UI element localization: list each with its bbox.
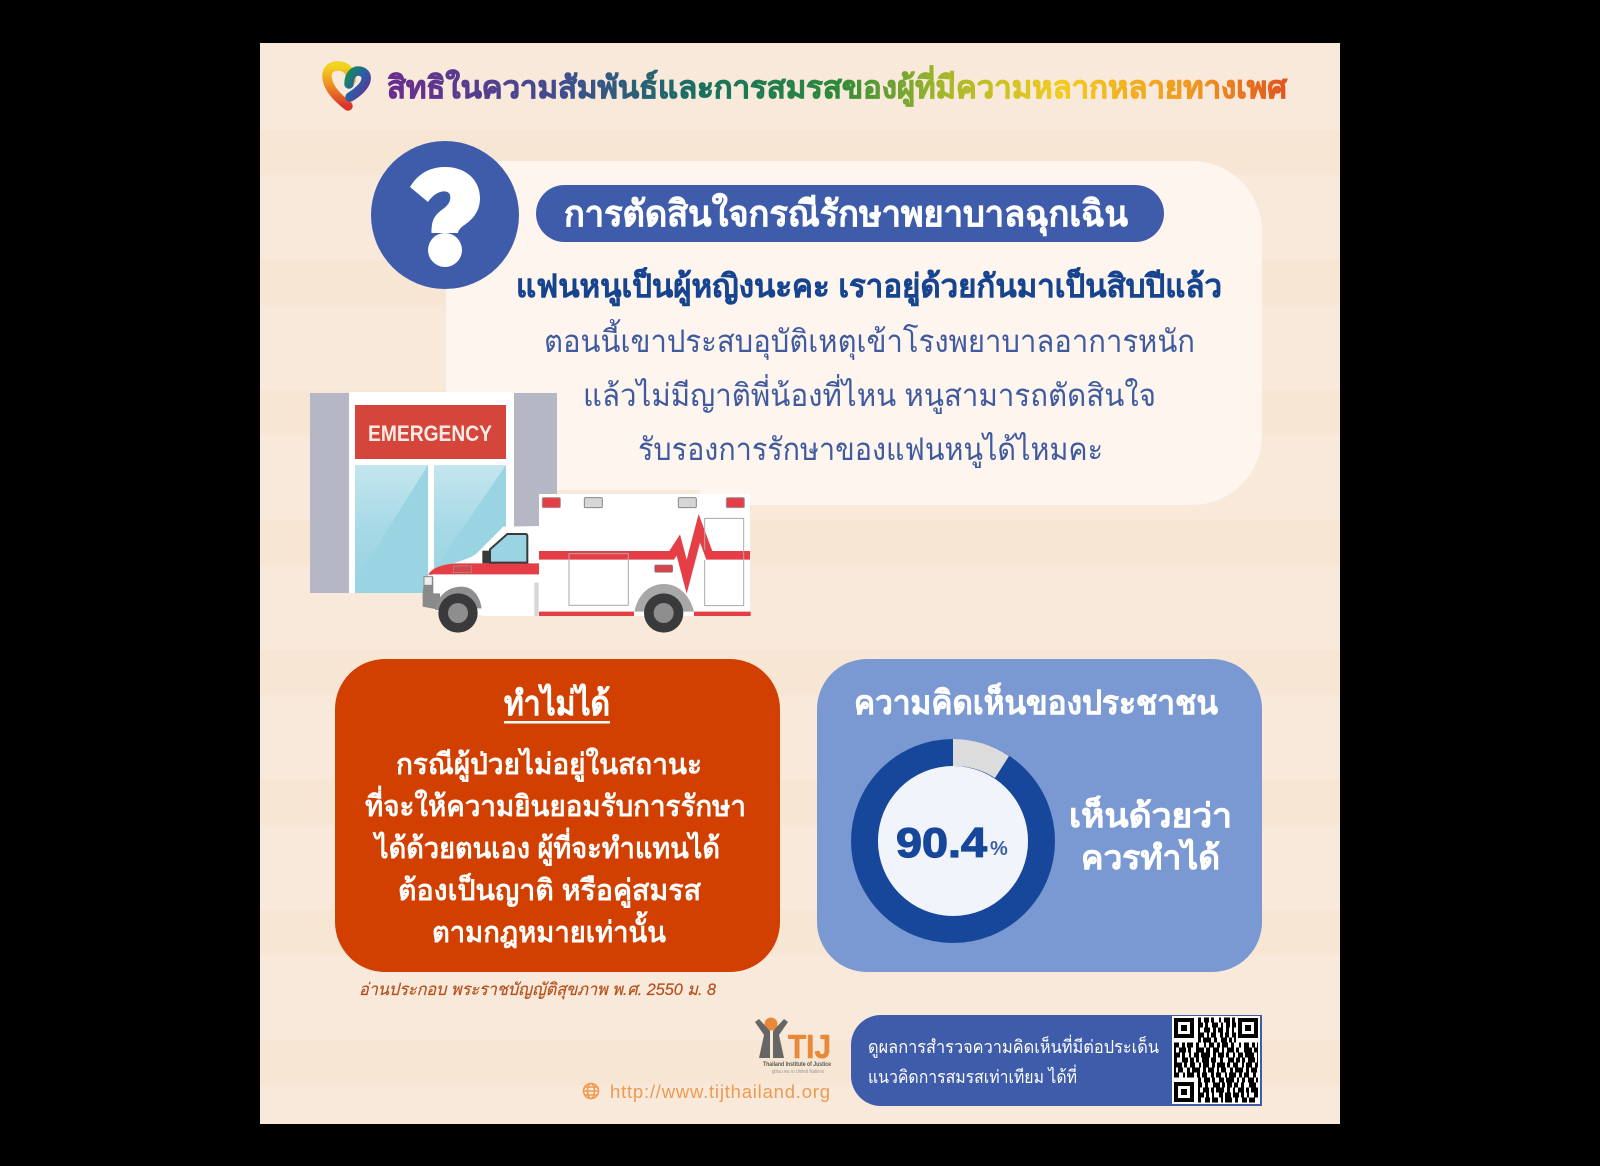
survey text	[868, 1034, 1159, 1087]
panel heading: cannot do: ทำไม่ได้	[504, 683, 610, 723]
QR code	[1172, 1016, 1260, 1104]
logo: TIJ: TIJ	[788, 1028, 831, 1065]
opinion label: เห็นด้วยว่า	[1069, 795, 1232, 834]
explanation text	[365, 747, 746, 949]
panel: survey link with QR	[851, 1015, 1262, 1106]
question text: รับรองการรักษาของแฟนหนูได้ไหมคะ	[638, 432, 1103, 468]
panel: public opinion	[817, 659, 1262, 972]
panel heading: public opinion: ความคิดเห็นของประชาชน	[854, 682, 1218, 721]
opinion label: ควรทำได้	[1081, 838, 1220, 876]
explanation text: ได้ด้วยตนเอง ผู้ที่จะทำแทนได้	[372, 827, 720, 866]
panel: question bubble	[446, 161, 1262, 505]
logo: TIJ: Thailand Institute of Justice	[763, 1061, 831, 1068]
question text: แล้วไม่มีญาติพี่น้องที่ไหน หนูสามารถตัดสินใจ	[583, 374, 1156, 414]
poster background	[260, 43, 1340, 1124]
donut chart: 90.4%	[864, 739, 1042, 930]
question text	[516, 266, 1222, 468]
explanation text: กรณีผู้ป่วยไม่อยู่ในสถานะ	[396, 747, 702, 782]
logo: rainbow heart	[327, 66, 366, 106]
source note: อ่านประกอบ พระราชบัญญัติสุขภาพ พ.ศ. 2550 ม. 8	[359, 980, 717, 1000]
icon: question mark circle	[371, 141, 519, 289]
donut chart: 90.4%: 90.4	[896, 819, 988, 866]
panel: cannot do	[335, 659, 780, 972]
survey text: ดูผลการสำรวจความคิดเห็นที่มีต่อประเด็น	[868, 1034, 1159, 1058]
logo: TIJ	[755, 1018, 831, 1075]
heading pill: การตัดสินใจกรณีรักษาพยาบาลฉุกเฉิน	[564, 192, 1128, 237]
title: สิทธิในความสัมพันธ์และการสมรสของผู้ที่มีความหลากหลายทางเพศ	[387, 65, 1288, 107]
donut chart: 90.4%: %	[990, 838, 1008, 860]
illustration: ambulance	[423, 494, 751, 633]
opinion label	[1069, 795, 1232, 876]
question text: ตอนนี้เขาประสบอุบัติเหตุเข้าโรงพยาบาลอาการหนัก	[544, 319, 1195, 361]
explanation text: ตามกฎหมายเท่านั้น	[432, 910, 666, 949]
explanation text: ต้องเป็นญาติ หรือคู่สมรส	[398, 872, 701, 908]
explanation text: ที่จะให้ความยินยอมรับการรักษา	[365, 785, 746, 823]
illustration: emergency building	[310, 392, 557, 593]
heading pill	[536, 185, 1164, 242]
illustration: emergency building: EMERGENCY	[368, 421, 492, 446]
website link: http://www.tijthailand.org	[610, 1081, 830, 1102]
survey text: แนวคิดการสมรสเท่าเทียม ได้ที่	[868, 1064, 1077, 1087]
logo: TIJ: gthuu wa ru United Nations	[772, 1069, 824, 1075]
question text: แฟนหนูเป็นผู้หญิงนะคะ เราอยู่ด้วยกันมาเป็นสิบปีแล้ว	[516, 266, 1222, 307]
